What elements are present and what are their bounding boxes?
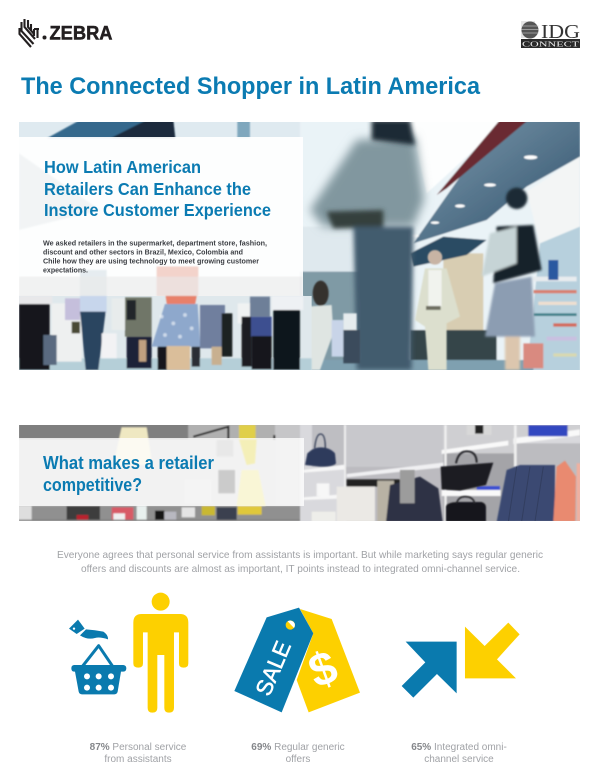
- photo top left: [47, 120, 250, 138]
- icon: price tags: [234, 608, 360, 712]
- blue arrow: [402, 642, 457, 698]
- logo: Zebra: [20, 19, 113, 47]
- caption: 65%: channel service: [424, 754, 494, 765]
- photo right half: [300, 423, 587, 523]
- logo: IDG Connect: CONNECT: [522, 40, 580, 48]
- caption: 65%: 65% Integrated omni-: [411, 742, 507, 753]
- hero paragraph: discount and other sectors in Brazil, Mexico, Colombia and: [43, 248, 243, 256]
- hero heading: Retailers Can Enhance the: [44, 179, 251, 199]
- caption: 87%: [90, 742, 187, 765]
- yellow arrow: [465, 623, 520, 678]
- caption: 69%: [251, 742, 345, 765]
- section heading: What makes a retailer: [43, 453, 214, 473]
- hero heading: [44, 157, 271, 220]
- icon: converging arrows: [402, 623, 520, 698]
- faint figures behind panel: [19, 153, 302, 297]
- big blurred figure: [310, 137, 424, 227]
- caption: 65%: [411, 742, 507, 765]
- caption: 69%: 69% Regular generic: [251, 742, 345, 753]
- panel: clothing store photo: [18, 423, 587, 523]
- hero heading: How Latin American: [44, 157, 201, 177]
- caption: 69%: offers: [286, 754, 310, 765]
- caption: 87%: 87% Personal service: [90, 742, 187, 753]
- hero paragraph: We asked retailers in the supermarket, department store, fashion,: [43, 238, 267, 248]
- photo right half: [300, 120, 580, 373]
- hero paragraph: [43, 238, 267, 274]
- caption: 87%: from assistants: [104, 754, 172, 765]
- sale label: SALE: [250, 637, 296, 699]
- hanging garments behind panel: [218, 438, 266, 507]
- hero heading: Instore Customer Experience: [44, 200, 271, 220]
- intro text: [57, 549, 543, 575]
- clothes on rail: [347, 479, 400, 487]
- icon: zebra head: [20, 19, 39, 47]
- walking woman: [482, 188, 542, 370]
- photo left half: [18, 423, 308, 523]
- icon: basket: [69, 620, 126, 694]
- shirts: [497, 465, 555, 522]
- logo: IDG Connect: [521, 21, 580, 48]
- intro text: Everyone agrees that personal service from assistants is important. But while marketing says regular generic: [57, 549, 543, 561]
- black bags: [441, 463, 493, 491]
- icon: person: [133, 593, 188, 713]
- wordmark: ZEBRA: [50, 24, 113, 44]
- crowd strip: [18, 296, 312, 372]
- section heading: competitive?: [43, 475, 142, 495]
- icon: shopping basket, hand and person: [69, 593, 188, 713]
- hero paragraph: Chile how they are using technology to meet growing customer: [43, 256, 259, 266]
- translucent text panel: [19, 438, 304, 506]
- dollar sign: $: [302, 640, 344, 698]
- walking man: [415, 250, 460, 370]
- hero paragraph: expectations.: [43, 266, 88, 274]
- distant shopper: [312, 280, 360, 370]
- handbag navy: [305, 434, 581, 522]
- translucent text panel: [19, 137, 303, 296]
- section heading: [43, 453, 214, 495]
- logo: IDG Connect: IDG: [541, 21, 580, 43]
- intro text: offers and discounts are almost as important, IT points instead to integrated omni-channel service.: [81, 563, 520, 575]
- panel: hero photo of blurred shoppers: [18, 120, 580, 373]
- blue tag: [234, 608, 313, 712]
- title: The Connected Shopper in Latin America: [21, 73, 481, 100]
- icon: hand with card: [69, 620, 85, 634]
- yellow tag: [297, 609, 360, 712]
